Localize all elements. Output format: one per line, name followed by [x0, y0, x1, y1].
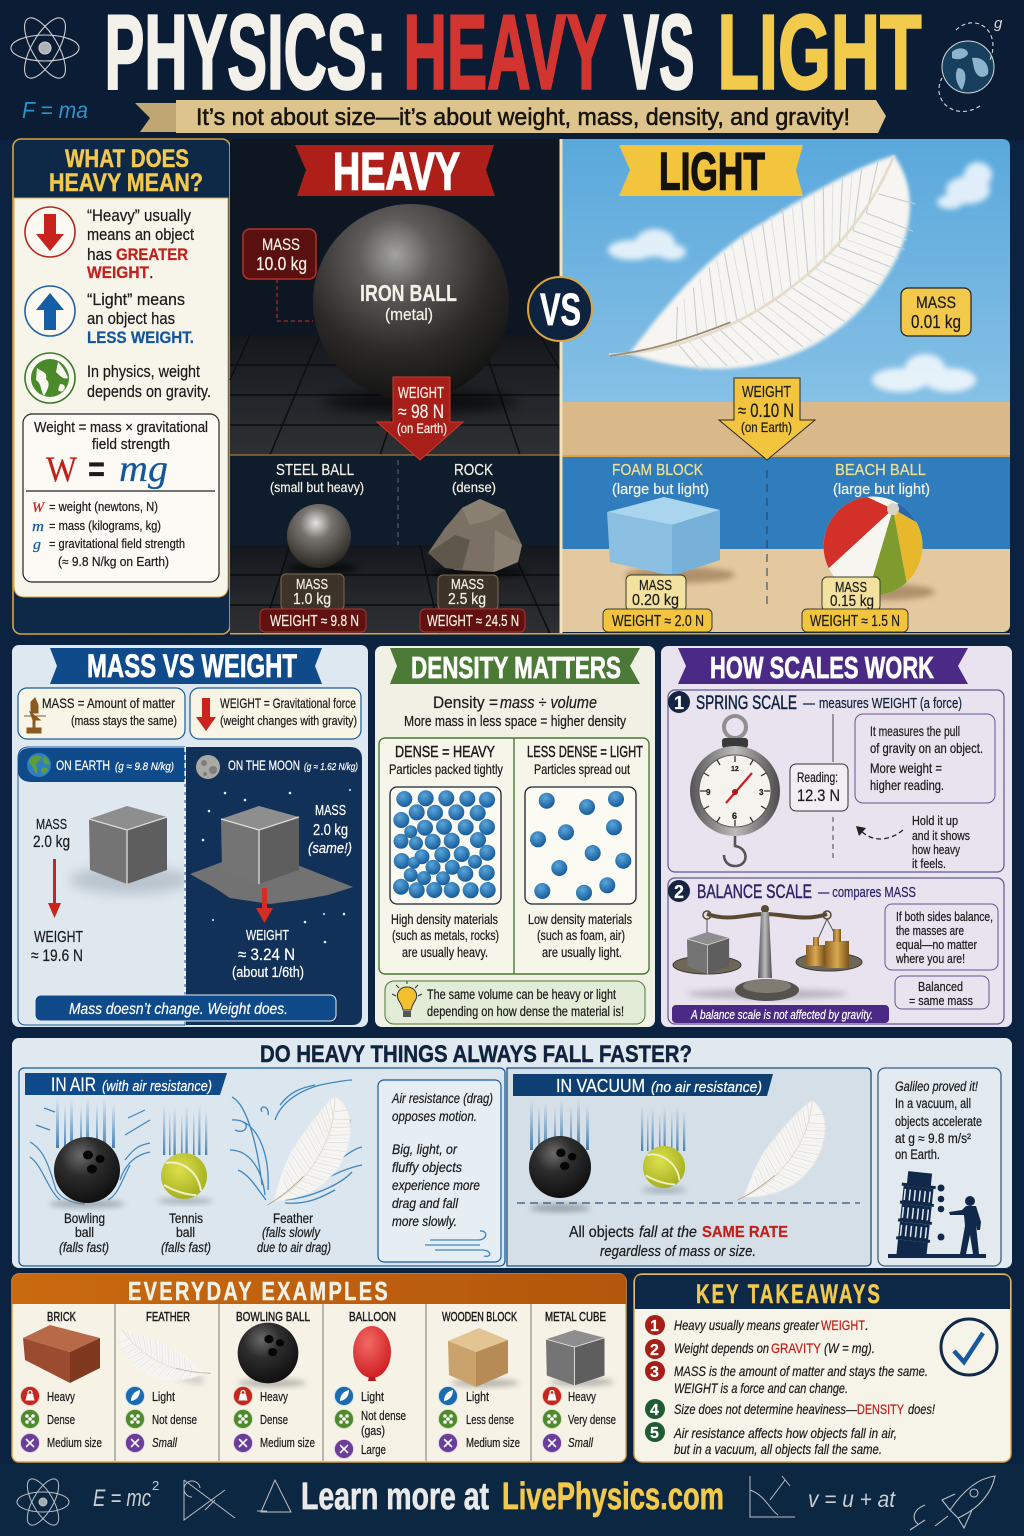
on earth: MASS	[36, 816, 67, 833]
divider	[766, 470, 768, 610]
drag note: Air resistance (drag)	[391, 1090, 493, 1106]
takeaway 3: 3	[650, 1364, 659, 1381]
item: bowling ball	[234, 1309, 315, 1452]
text: gravity: In physics, weight	[87, 363, 200, 381]
panel: key takeaways	[634, 1274, 1011, 1462]
item: wooden block: Medium size	[466, 1436, 520, 1450]
heading: EVERYDAY EXAMPLES	[128, 1276, 390, 1306]
arrow note	[856, 813, 970, 871]
tennis ball falling	[157, 1105, 213, 1255]
item: metal cube: Heavy	[568, 1390, 597, 1404]
text: gravity: depends on gravity.	[87, 383, 211, 401]
weight arrow 98 N: WEIGHT	[398, 385, 444, 402]
takeaway 4: DENSITY	[857, 1401, 905, 1417]
weight arrow 0.10 N: (on Earth)	[741, 419, 792, 435]
formula box: =	[88, 448, 105, 489]
formula: F = ma: F = ma	[22, 97, 88, 123]
formula box: = mass (kilograms, kg)	[49, 519, 161, 533]
divider	[397, 460, 399, 545]
galileo box	[878, 1068, 1001, 1266]
density formula: Density =	[433, 693, 498, 712]
item: bowling ball: Heavy	[260, 1390, 289, 1404]
formula: E = mc2: E = mc	[93, 1485, 151, 1512]
caption pill: Mass doesn’t change. Weight does.	[69, 1001, 288, 1018]
item: balloon: BALLOON	[349, 1309, 396, 1324]
galileo box: In a vacuum, all	[895, 1096, 971, 1111]
item: feather	[110, 1309, 213, 1452]
icon: spring scale dial: 3	[759, 788, 764, 797]
on the moon: (g ≈ 1.62 N/kg)	[304, 762, 358, 773]
takeaway 1	[645, 1315, 869, 1335]
panel: light side	[562, 138, 1010, 632]
text: light meaning: an object has	[87, 310, 175, 328]
feather falling: (falls slowly	[262, 1225, 321, 1240]
density formula	[404, 693, 626, 730]
VS badge: VS	[540, 284, 581, 335]
item: feather: Not dense	[152, 1413, 197, 1427]
panel: density matters	[375, 646, 655, 1027]
balanced tag	[895, 976, 989, 1009]
definition: weight: (weight changes with gravity)	[220, 713, 357, 728]
balance text	[885, 904, 998, 970]
on the moon: (same!)	[308, 840, 352, 857]
tip callout: The same volume can be heavy or light	[427, 987, 616, 1002]
takeaway 3	[645, 1361, 928, 1396]
on the moon: (about 1/6th)	[232, 965, 304, 981]
rock: 2.5 kg	[448, 591, 486, 608]
item: brick: Dense	[47, 1413, 75, 1427]
foam block: WEIGHT ≈ 2.0 N	[612, 613, 704, 630]
beach ball: WEIGHT ≈ 1.5 N	[810, 613, 900, 630]
text box: It measures the pull	[870, 723, 960, 739]
item: metal cube: Small	[568, 1436, 594, 1450]
footer	[17, 1474, 995, 1530]
definition: weight: WEIGHT = Gravitational force	[220, 695, 356, 711]
clouds	[608, 162, 992, 392]
VS badge	[528, 277, 592, 341]
weight arrow 0.10 N: ≈ 0.10 N	[738, 401, 794, 422]
ground line	[517, 1202, 860, 1204]
weight arrow 98 N: (on Earth)	[397, 420, 447, 436]
call to action: Learn more at	[301, 1476, 489, 1518]
item: wooden block: Less dense	[466, 1413, 514, 1427]
definition: mass	[18, 688, 185, 739]
weight arrow 98 N: ≈ 98 N	[398, 402, 444, 423]
feather falling	[230, 1080, 369, 1255]
weight arrow 0.10 N	[719, 378, 815, 460]
tennis ball	[641, 1106, 686, 1193]
rock: MASS	[451, 577, 484, 593]
heading: WHAT DOES	[65, 145, 189, 173]
takeaway 4: Size does not determine heaviness—	[674, 1401, 858, 1417]
text: light meaning: “Light” means	[87, 291, 185, 309]
heading: HEAVY MEAN?	[49, 169, 203, 197]
heading banner: MASS VS WEIGHT	[87, 648, 297, 684]
note pill: A balance scale is not affected by gravity.	[690, 1008, 873, 1022]
takeaway 1: .	[865, 1317, 869, 1333]
on the moon: WEIGHT	[246, 927, 289, 944]
item: metal cube: METAL CUBE	[545, 1309, 606, 1324]
less dense column: (such as foam, air)	[537, 928, 625, 943]
same rate caption: SAME RATE	[702, 1224, 788, 1241]
formula box: W	[46, 449, 77, 489]
weight arrow 0.10 N: WEIGHT	[742, 384, 791, 401]
arrow note: how heavy	[912, 842, 960, 857]
spring scale section: measures WEIGHT (a force)	[819, 695, 962, 712]
bowling ball falling: ball	[75, 1225, 94, 1240]
takeaway 1: 1	[650, 1318, 659, 1335]
arrow note: and it shows	[912, 828, 970, 843]
icon: spring scale dial: 9	[706, 788, 711, 797]
icon: blue up arrow	[25, 286, 75, 336]
formula box: g	[33, 537, 42, 553]
icon: chalk atom	[17, 1474, 69, 1530]
item: brick: BRICK	[47, 1309, 76, 1324]
steel ball: 1.0 kg	[293, 591, 331, 608]
item: wooden block: WOODEN BLOCK	[442, 1309, 517, 1324]
icon: red down arrow	[25, 207, 75, 257]
foam block: (large but light)	[612, 482, 709, 498]
panel: mass vs weight	[12, 645, 368, 1027]
panel: how scales work	[661, 646, 1012, 1027]
density formula: More mass in less space = higher density	[404, 713, 626, 730]
note pill	[672, 1005, 889, 1023]
text: heavy meaning: WEIGHT	[87, 264, 149, 282]
panel: do heavy things always fall faster	[12, 1038, 1012, 1268]
beach ball: BEACH BALL	[835, 462, 926, 479]
spring scale section: —	[803, 695, 815, 712]
dense column: are usually heavy.	[402, 945, 488, 960]
item: wooden block	[438, 1309, 520, 1452]
on earth: 2.0 kg	[33, 833, 70, 851]
takeaway 1: Heavy usually means greater	[674, 1317, 820, 1333]
balance text: If both sides balance,	[896, 910, 993, 924]
drag note: more slowly.	[392, 1213, 457, 1229]
mass tag 10.0 kg: MASS	[262, 235, 300, 254]
on the moon: 2.0 kg	[313, 822, 348, 839]
heading banner: HOW SCALES WORK	[710, 650, 934, 685]
item: feather: FEATHER	[146, 1309, 190, 1324]
on the moon: ≈ 3.24 N	[238, 946, 295, 964]
text: light meaning	[87, 291, 194, 347]
formula: v = u + at: v = u + at	[808, 1486, 896, 1512]
in vacuum panel	[507, 1068, 871, 1266]
item: brick: Medium size	[47, 1436, 102, 1450]
bowling ball	[529, 1100, 591, 1212]
beach ball	[802, 462, 935, 632]
panel: heavy side	[230, 139, 560, 634]
in air panel: (with air resistance)	[102, 1078, 212, 1095]
foam block: 0.20 kg	[632, 592, 679, 609]
mass tag 10.0 kg	[243, 229, 316, 321]
text box: higher reading.	[870, 777, 944, 793]
spring scale section	[668, 690, 1004, 872]
on earth: (g ≈ 9.8 N/kg)	[115, 761, 174, 773]
bowling ball falling	[30, 1098, 150, 1255]
on earth	[18, 747, 190, 1025]
tip callout: depending on how dense the material is!	[427, 1004, 624, 1019]
takeaway 5: but in a vacuum, all objects fall the same.	[674, 1441, 882, 1457]
feather falling: due to air drag)	[257, 1240, 331, 1255]
drag note: opposes motion.	[392, 1108, 477, 1124]
dense column: (such as metals, rocks)	[392, 928, 499, 943]
icon: green earth	[25, 353, 75, 403]
reading	[790, 764, 848, 811]
drag note: Big, light, or	[392, 1141, 458, 1157]
text: heavy meaning: .	[149, 264, 154, 282]
text: heavy meaning: “Heavy” usually	[87, 207, 192, 225]
formula box: (≈ 9.8 N/kg on Earth)	[58, 555, 169, 569]
foam block: MASS	[639, 578, 672, 594]
balance scale section: 2	[674, 882, 684, 902]
text: light meaning: LESS WEIGHT.	[87, 329, 194, 347]
steel ball: STEEL BALL	[276, 462, 354, 479]
takeaway 3: MASS is the amount of matter and stays the same.	[674, 1363, 928, 1379]
on the moon	[186, 747, 362, 1025]
density formula: mass ÷ volume	[500, 693, 597, 712]
item: bowling ball: BOWLING BALL	[236, 1309, 310, 1324]
subtitle ribbon: It’s not about size—it’s about weight, mass, density, and gravity!	[196, 104, 850, 131]
reading: 12.3 N	[797, 786, 840, 805]
icon: spring scale dial: 6	[732, 811, 737, 821]
iron ball	[313, 204, 515, 414]
balance text: the masses are	[896, 924, 964, 938]
steel ball: WEIGHT ≈ 9.8 N	[270, 613, 359, 630]
bowling ball falling: Bowling	[64, 1211, 105, 1226]
formula box: Weight = mass × gravitational	[34, 420, 208, 436]
formula box: field strength	[92, 437, 170, 453]
call to action: LivePhysics.com	[502, 1476, 724, 1518]
call to action	[301, 1476, 724, 1518]
feather falling: Feather	[273, 1211, 313, 1226]
rock: (dense)	[452, 479, 496, 495]
balanced tag: Balanced	[918, 979, 963, 994]
doodle: force vectors	[184, 1480, 235, 1520]
same rate caption: fall at the	[639, 1224, 697, 1241]
takeaway 1: WEIGHT	[821, 1317, 865, 1333]
same rate caption: All objects	[569, 1224, 634, 1241]
doodle: graph	[750, 1476, 795, 1517]
iron ball: (metal)	[385, 306, 433, 324]
same rate caption	[569, 1224, 788, 1260]
text: heavy meaning: means an object	[87, 226, 194, 244]
doodle: triangle	[257, 1480, 291, 1512]
icon: leaning tower and figure	[888, 1171, 986, 1258]
foam block: FOAM BLOCK	[612, 462, 703, 479]
item: metal cube	[542, 1309, 616, 1452]
icon: check mark	[941, 1319, 997, 1375]
icon: chalk rocket	[910, 1476, 995, 1530]
mass tag 0.01 kg	[901, 288, 971, 336]
less dense column: LESS DENSE = LIGHT	[527, 744, 643, 761]
arrow note: Hold it up	[912, 813, 958, 828]
item: balloon: Light	[361, 1390, 384, 1404]
title	[104, 0, 922, 112]
text: gravity	[87, 363, 211, 401]
drag note: experience more	[392, 1177, 480, 1193]
beach ball: (large but light)	[833, 482, 930, 498]
reading: Reading:	[797, 769, 838, 785]
in air panel: IN AIR	[51, 1075, 96, 1096]
heading banner: DENSITY MATTERS	[411, 650, 621, 685]
balanced tag: = same mass	[909, 993, 973, 1008]
rock: ROCK	[454, 462, 493, 479]
item: feather: Small	[152, 1436, 178, 1450]
item: balloon: Large	[361, 1443, 386, 1457]
item: bowling ball: Medium size	[260, 1436, 315, 1450]
panel: everyday examples	[12, 1274, 626, 1462]
balance scale section: BALANCE SCALE	[697, 882, 812, 903]
less dense column: are usually light.	[542, 945, 622, 960]
on the moon: MASS	[315, 802, 346, 819]
dense column: DENSE = HEAVY	[395, 744, 495, 761]
text: heavy meaning: has	[87, 246, 112, 264]
definition: mass: MASS = Amount of matter	[42, 695, 175, 711]
mass tag 0.01 kg: 0.01 kg	[911, 312, 961, 332]
on earth: ≈ 19.6 N	[31, 946, 83, 965]
beach ball: MASS	[835, 580, 867, 596]
steel ball: MASS	[296, 577, 328, 593]
on earth: ON EARTH	[56, 757, 110, 773]
drag note: drag and fall	[392, 1195, 459, 1211]
icon: chalk earth with gravity: g	[994, 15, 1003, 32]
text box	[855, 714, 995, 803]
takeaway 4: 4	[650, 1402, 659, 1419]
dense column	[389, 744, 503, 960]
formula box: W	[32, 500, 45, 516]
arrow note: it feels.	[912, 856, 946, 871]
heavy banner: HEAVY	[333, 142, 460, 202]
panel: what does heavy mean	[13, 139, 230, 634]
formula box: = weight (newtons, N)	[49, 500, 158, 514]
feather	[597, 138, 957, 445]
spring scale section: 1	[674, 693, 684, 713]
tennis ball falling: (falls fast)	[161, 1240, 211, 1255]
icon: balance scale	[673, 905, 862, 1001]
takeaway 2	[645, 1339, 875, 1359]
spring scale section: SPRING SCALE	[696, 693, 797, 714]
balance scale section: — compares MASS	[818, 884, 916, 901]
item: bowling ball: Dense	[260, 1413, 288, 1427]
takeaway 5: Air resistance affects how objects fall in air,	[673, 1425, 897, 1441]
beach ball: 0.15 kg	[830, 593, 874, 610]
bowling ball falling: (falls fast)	[59, 1240, 109, 1255]
text: heavy meaning: GREATER	[116, 246, 188, 264]
icon: spring scale dial: 12	[731, 766, 739, 773]
light banner: LIGHT	[659, 142, 765, 202]
takeaway 2: (W = mg).	[824, 1340, 875, 1356]
takeaway 3: WEIGHT is a force and can change.	[674, 1380, 848, 1396]
caption pill	[35, 995, 336, 1021]
formula box: = gravitational field strength	[49, 537, 185, 551]
iron ball: IRON BALL	[360, 280, 457, 306]
comparison frame	[379, 738, 649, 974]
feather	[731, 1096, 844, 1224]
in vacuum panel: IN VACUUM	[556, 1076, 645, 1096]
item: balloon	[334, 1309, 406, 1458]
rock	[420, 462, 526, 632]
mass tag 10.0 kg: 10.0 kg	[256, 254, 307, 274]
item: brick: Heavy	[47, 1390, 76, 1404]
dense column: Particles packed tightly	[389, 761, 503, 777]
on the moon: ON THE MOON	[228, 757, 300, 773]
balance text: equal—no matter	[896, 938, 977, 952]
steel ball	[260, 462, 366, 632]
drag note: fluffy objects	[392, 1159, 462, 1175]
takeaway 4	[645, 1399, 935, 1419]
takeaway 2: GRAVITY	[771, 1340, 822, 1356]
formula: E = mc2: 2	[152, 1478, 159, 1493]
dense column: High density materials	[391, 912, 498, 927]
text: heavy meaning	[87, 207, 194, 282]
item: wooden block: Light	[466, 1390, 489, 1404]
foam block	[603, 462, 735, 632]
item: balloon: Not dense	[361, 1409, 406, 1423]
icon: chalk atom	[11, 12, 79, 84]
takeaway 5: 5	[650, 1425, 659, 1442]
less dense column	[525, 744, 643, 960]
weight arrow 98 N	[377, 377, 463, 460]
mass tag 0.01 kg: MASS	[916, 293, 956, 312]
balance scale section	[668, 878, 1004, 1024]
galileo box: objects accelerate	[895, 1114, 982, 1129]
balance text: where you are!	[895, 952, 965, 966]
tennis ball falling: Tennis	[169, 1211, 203, 1226]
text box: More weight =	[870, 760, 942, 776]
drag note	[378, 1080, 501, 1262]
definition: mass: (mass stays the same)	[71, 713, 177, 728]
formula box: mg	[119, 448, 168, 490]
item: feather: Light	[152, 1390, 175, 1404]
icon: chalk earth with gravity	[939, 15, 1003, 111]
formula box: m	[32, 519, 44, 535]
on earth: WEIGHT	[34, 929, 83, 946]
icon: spring scale dial	[690, 716, 780, 866]
in air panel	[19, 1068, 505, 1266]
takeaway 2: 2	[650, 1342, 659, 1359]
formula box	[23, 414, 219, 582]
tip callout	[385, 981, 645, 1024]
takeaway 5	[645, 1422, 897, 1457]
takeaway 4: does!	[908, 1401, 935, 1417]
definition: weight	[190, 688, 361, 739]
less dense column: Low density materials	[528, 912, 632, 927]
less dense column: Particles spread out	[534, 761, 630, 777]
same rate caption: regardless of mass or size.	[600, 1243, 756, 1260]
rock: WEIGHT ≈ 24.5 N	[427, 613, 519, 630]
galileo box: Galileo proved it!	[895, 1079, 978, 1094]
item: brick	[20, 1309, 102, 1452]
item: balloon: (gas)	[361, 1424, 385, 1438]
galileo box: on Earth.	[895, 1147, 940, 1162]
center divider	[560, 139, 562, 634]
takeaway 2: Weight depends on	[674, 1340, 769, 1356]
item: metal cube: Very dense	[568, 1413, 616, 1427]
in vacuum panel: (no air resistance)	[651, 1079, 762, 1096]
tennis ball falling: ball	[176, 1225, 195, 1240]
galileo box: at g ≈ 9.8 m/s²	[895, 1131, 971, 1146]
heading: DO HEAVY THINGS ALWAYS FALL FASTER?	[260, 1041, 692, 1068]
heading: KEY TAKEAWAYS	[696, 1279, 882, 1309]
text box: of gravity on an object.	[870, 740, 983, 756]
heading	[49, 145, 203, 197]
steel ball: (small but heavy)	[270, 479, 364, 495]
